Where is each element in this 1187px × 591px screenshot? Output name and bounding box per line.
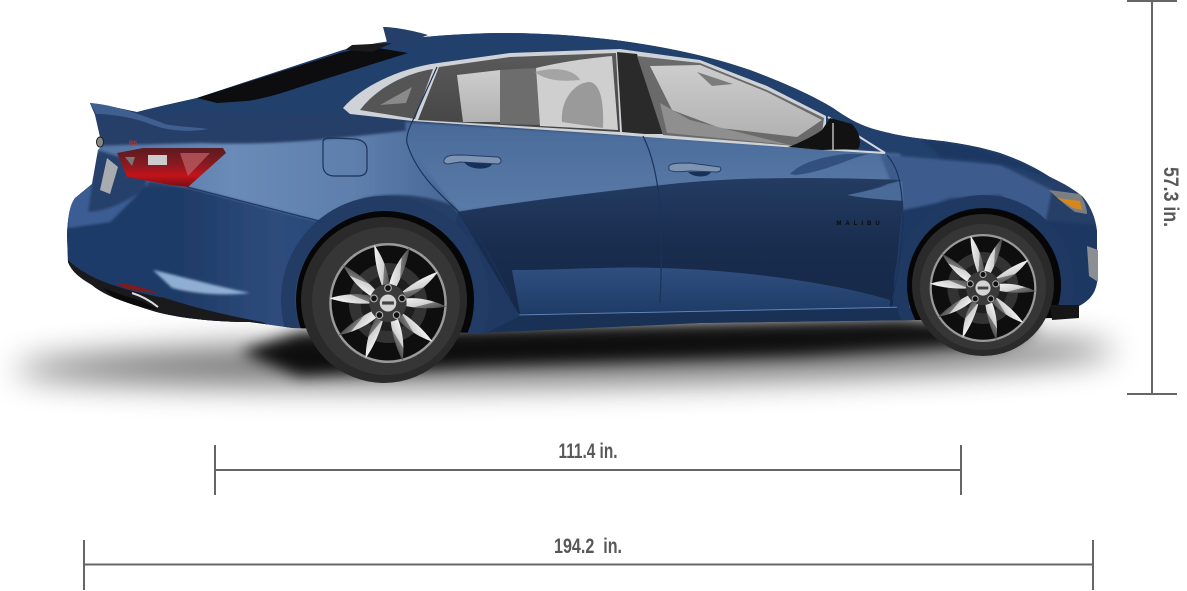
dark door reflection <box>458 178 903 314</box>
fender wedge <box>847 181 904 201</box>
license plate <box>100 158 118 194</box>
rear spoiler <box>90 103 208 131</box>
lower door band <box>512 267 890 314</box>
area behind the rear wheel <box>458 214 520 333</box>
overall length dimension <box>84 535 1093 590</box>
chrome trim <box>343 49 826 150</box>
rear wheel <box>301 217 467 383</box>
roof and shoulder <box>90 33 1061 182</box>
side windows <box>343 49 885 153</box>
hood crease <box>928 142 1038 173</box>
height label: 57.3 in. <box>1159 167 1182 227</box>
soft paint shading <box>60 25 1110 335</box>
amber lamp <box>1057 198 1082 210</box>
mirror <box>788 118 860 150</box>
rear door upper <box>405 122 905 212</box>
front door glass <box>637 56 824 148</box>
headlight <box>1049 190 1087 214</box>
body lines: doors and fuel door <box>187 67 903 303</box>
trunk emblem <box>96 137 104 147</box>
tail light <box>117 148 226 187</box>
rear lower panel <box>60 187 327 335</box>
front chin <box>1050 305 1079 320</box>
MALIBU badge: MALIBU <box>836 221 884 227</box>
rear quarter light <box>85 130 452 223</box>
ground shadow <box>15 318 1115 394</box>
overall length label: 194.2 in. <box>554 535 622 558</box>
door handles <box>444 155 721 176</box>
height dimension <box>1127 1 1182 394</box>
side reflection on door <box>790 154 868 175</box>
front fender <box>880 154 1052 225</box>
rear bumper highlight <box>153 270 250 294</box>
rear door glass <box>418 53 620 132</box>
car <box>60 25 1110 397</box>
front chrome lines <box>822 117 885 153</box>
door pillar <box>617 52 663 134</box>
roof antenna <box>383 27 428 46</box>
RS badge: RS <box>129 141 137 147</box>
front grille <box>1087 246 1098 282</box>
lower black fascia <box>68 260 268 324</box>
car body <box>67 33 1097 333</box>
sill <box>486 308 910 333</box>
wheelbase dimension <box>215 440 961 495</box>
front wheel <box>912 214 1054 356</box>
rear glass <box>197 47 408 103</box>
rear quarter glass <box>360 69 433 119</box>
wheel arch shading <box>281 196 475 333</box>
wheelbase label: 111.4 in. <box>558 440 618 463</box>
